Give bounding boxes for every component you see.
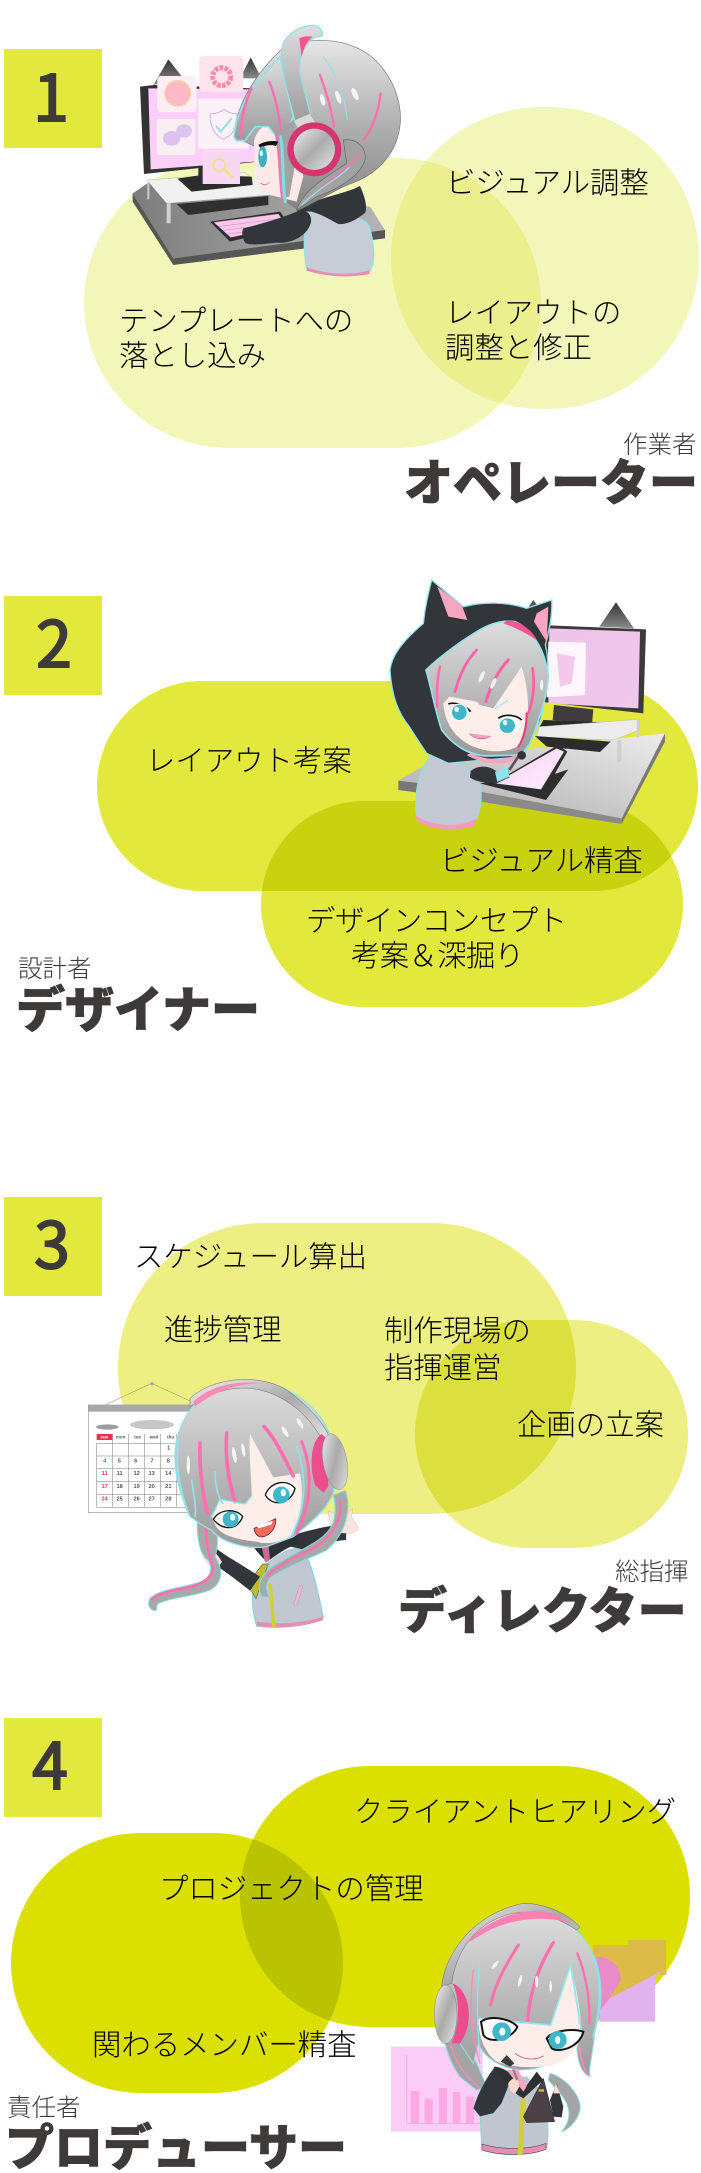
illustration: calendar: 24 <box>102 1497 109 1503</box>
number badge 2: 2 <box>36 594 72 686</box>
title: operator: オペレーター <box>404 457 698 511</box>
text: design concept: デザインコンセプト <box>306 905 567 938</box>
illustration: calendar: 11 <box>117 1471 123 1477</box>
illustration: calendar: 12 <box>134 1471 140 1477</box>
text: layout concept: レイアウト考案 <box>146 745 352 778</box>
illustration: operator at desk <box>133 26 400 276</box>
subtitle: responsible person: 責任者 <box>7 2094 80 2122</box>
pill: schedule and progress <box>118 1223 576 1514</box>
text: visual adjustment: ビジュアル調整 <box>446 167 649 200</box>
text: planning: 企画の立案 <box>517 1409 664 1442</box>
subtitle: architect: 設計者 <box>18 955 92 983</box>
illustration: calendar: 26 <box>134 1497 140 1503</box>
pill: client hearing <box>240 1766 690 2027</box>
pill: template work <box>84 158 541 448</box>
number badge 4: 4 <box>32 1716 68 1808</box>
illustration: calendar: thu <box>167 1435 174 1440</box>
illustration: calendar: sun <box>100 1435 109 1440</box>
pill: layout and visual <box>97 681 698 891</box>
panel: designer section <box>4 580 698 1038</box>
illustration: calendar: 27 <box>149 1497 155 1503</box>
illustration: calendar: 14 <box>165 1471 172 1477</box>
subtitle: overall command: 総指揮 <box>615 1558 688 1586</box>
text: site management <box>384 1315 531 1385</box>
text: design concept <box>306 905 567 973</box>
panel: operator section <box>4 26 699 511</box>
number badge 4 <box>4 1716 102 1817</box>
text: client hearing: クライアントヒアリング <box>354 1796 676 1829</box>
illustration: calendar: 28 <box>165 1497 171 1503</box>
number badge 1: 1 <box>33 48 69 140</box>
illustration: calendar: 17 <box>102 1484 108 1490</box>
panel: director section <box>4 1195 688 1639</box>
text: template placement: 落とし込み <box>119 340 266 373</box>
number badge 2 <box>4 594 102 695</box>
illustration: calendar: 19 <box>134 1484 140 1490</box>
illustration: producer with charts <box>391 1903 667 2155</box>
pill: member review <box>11 1833 343 2093</box>
illustration: calendar: wed <box>149 1435 159 1440</box>
text: design concept: 考案＆深掘り <box>351 940 524 973</box>
overlap of producer shapes <box>240 1840 343 2020</box>
illustration: calendar: 1 <box>167 1446 170 1452</box>
text: template placement: テンプレートへの <box>119 305 353 338</box>
number badge 3 <box>4 1195 102 1296</box>
title: designer: デザイナー <box>16 983 260 1038</box>
illustration: calendar: 6 <box>134 1458 137 1464</box>
text: layout adjustment <box>445 297 621 365</box>
text: site management: 制作現場の <box>384 1315 531 1348</box>
number badge 1 <box>4 48 102 148</box>
text: schedule: スケジュール算出 <box>134 1241 367 1274</box>
illustration: calendar: 8 <box>167 1458 170 1464</box>
pill: design concept <box>261 801 683 1007</box>
overlap of designer shapes <box>262 801 672 891</box>
illustration: calendar: 7 <box>150 1458 154 1464</box>
panel: producer section <box>4 1716 690 2173</box>
number badge 3: 3 <box>34 1195 70 1287</box>
illustration: calendar: 18 <box>117 1484 123 1490</box>
illustration: calendar: 4 <box>103 1458 107 1464</box>
overlap of operator shapes <box>391 161 541 404</box>
text: site management: 指揮運営 <box>384 1352 502 1385</box>
illustration: calendar: mon <box>116 1435 126 1440</box>
text: layout adjustment: 調整と修正 <box>445 332 592 365</box>
subtitle: worker: 作業者 <box>623 431 696 459</box>
illustration: calendar: 20 <box>149 1484 155 1490</box>
text: project management: プロジェクトの管理 <box>159 1873 424 1906</box>
text: layout adjustment: レイアウトの <box>445 297 621 330</box>
illustration: calendar: 13 <box>149 1471 155 1477</box>
text: progress management: 進捗管理 <box>164 1314 282 1347</box>
circle: planning <box>415 1320 688 1548</box>
illustration: calendar: 5 <box>118 1458 121 1464</box>
text: visual inspection: ビジュアル精査 <box>440 845 643 878</box>
title: director: ディレクター <box>398 1584 687 1639</box>
circle: visual adjustment <box>391 107 699 409</box>
text: member review: 関わるメンバー精査 <box>92 2029 357 2062</box>
text: template placement <box>119 305 353 373</box>
illustration: designer at desk <box>390 580 665 829</box>
illustration: calendar <box>88 1382 195 1513</box>
illustration: calendar: 25 <box>117 1497 123 1503</box>
illustration: calendar: 21 <box>165 1484 171 1490</box>
illustration: director character <box>149 1379 359 1628</box>
overlap of director shapes <box>415 1320 576 1513</box>
illustration: calendar: 11 <box>102 1471 108 1477</box>
illustration: calendar: tue <box>134 1435 142 1440</box>
